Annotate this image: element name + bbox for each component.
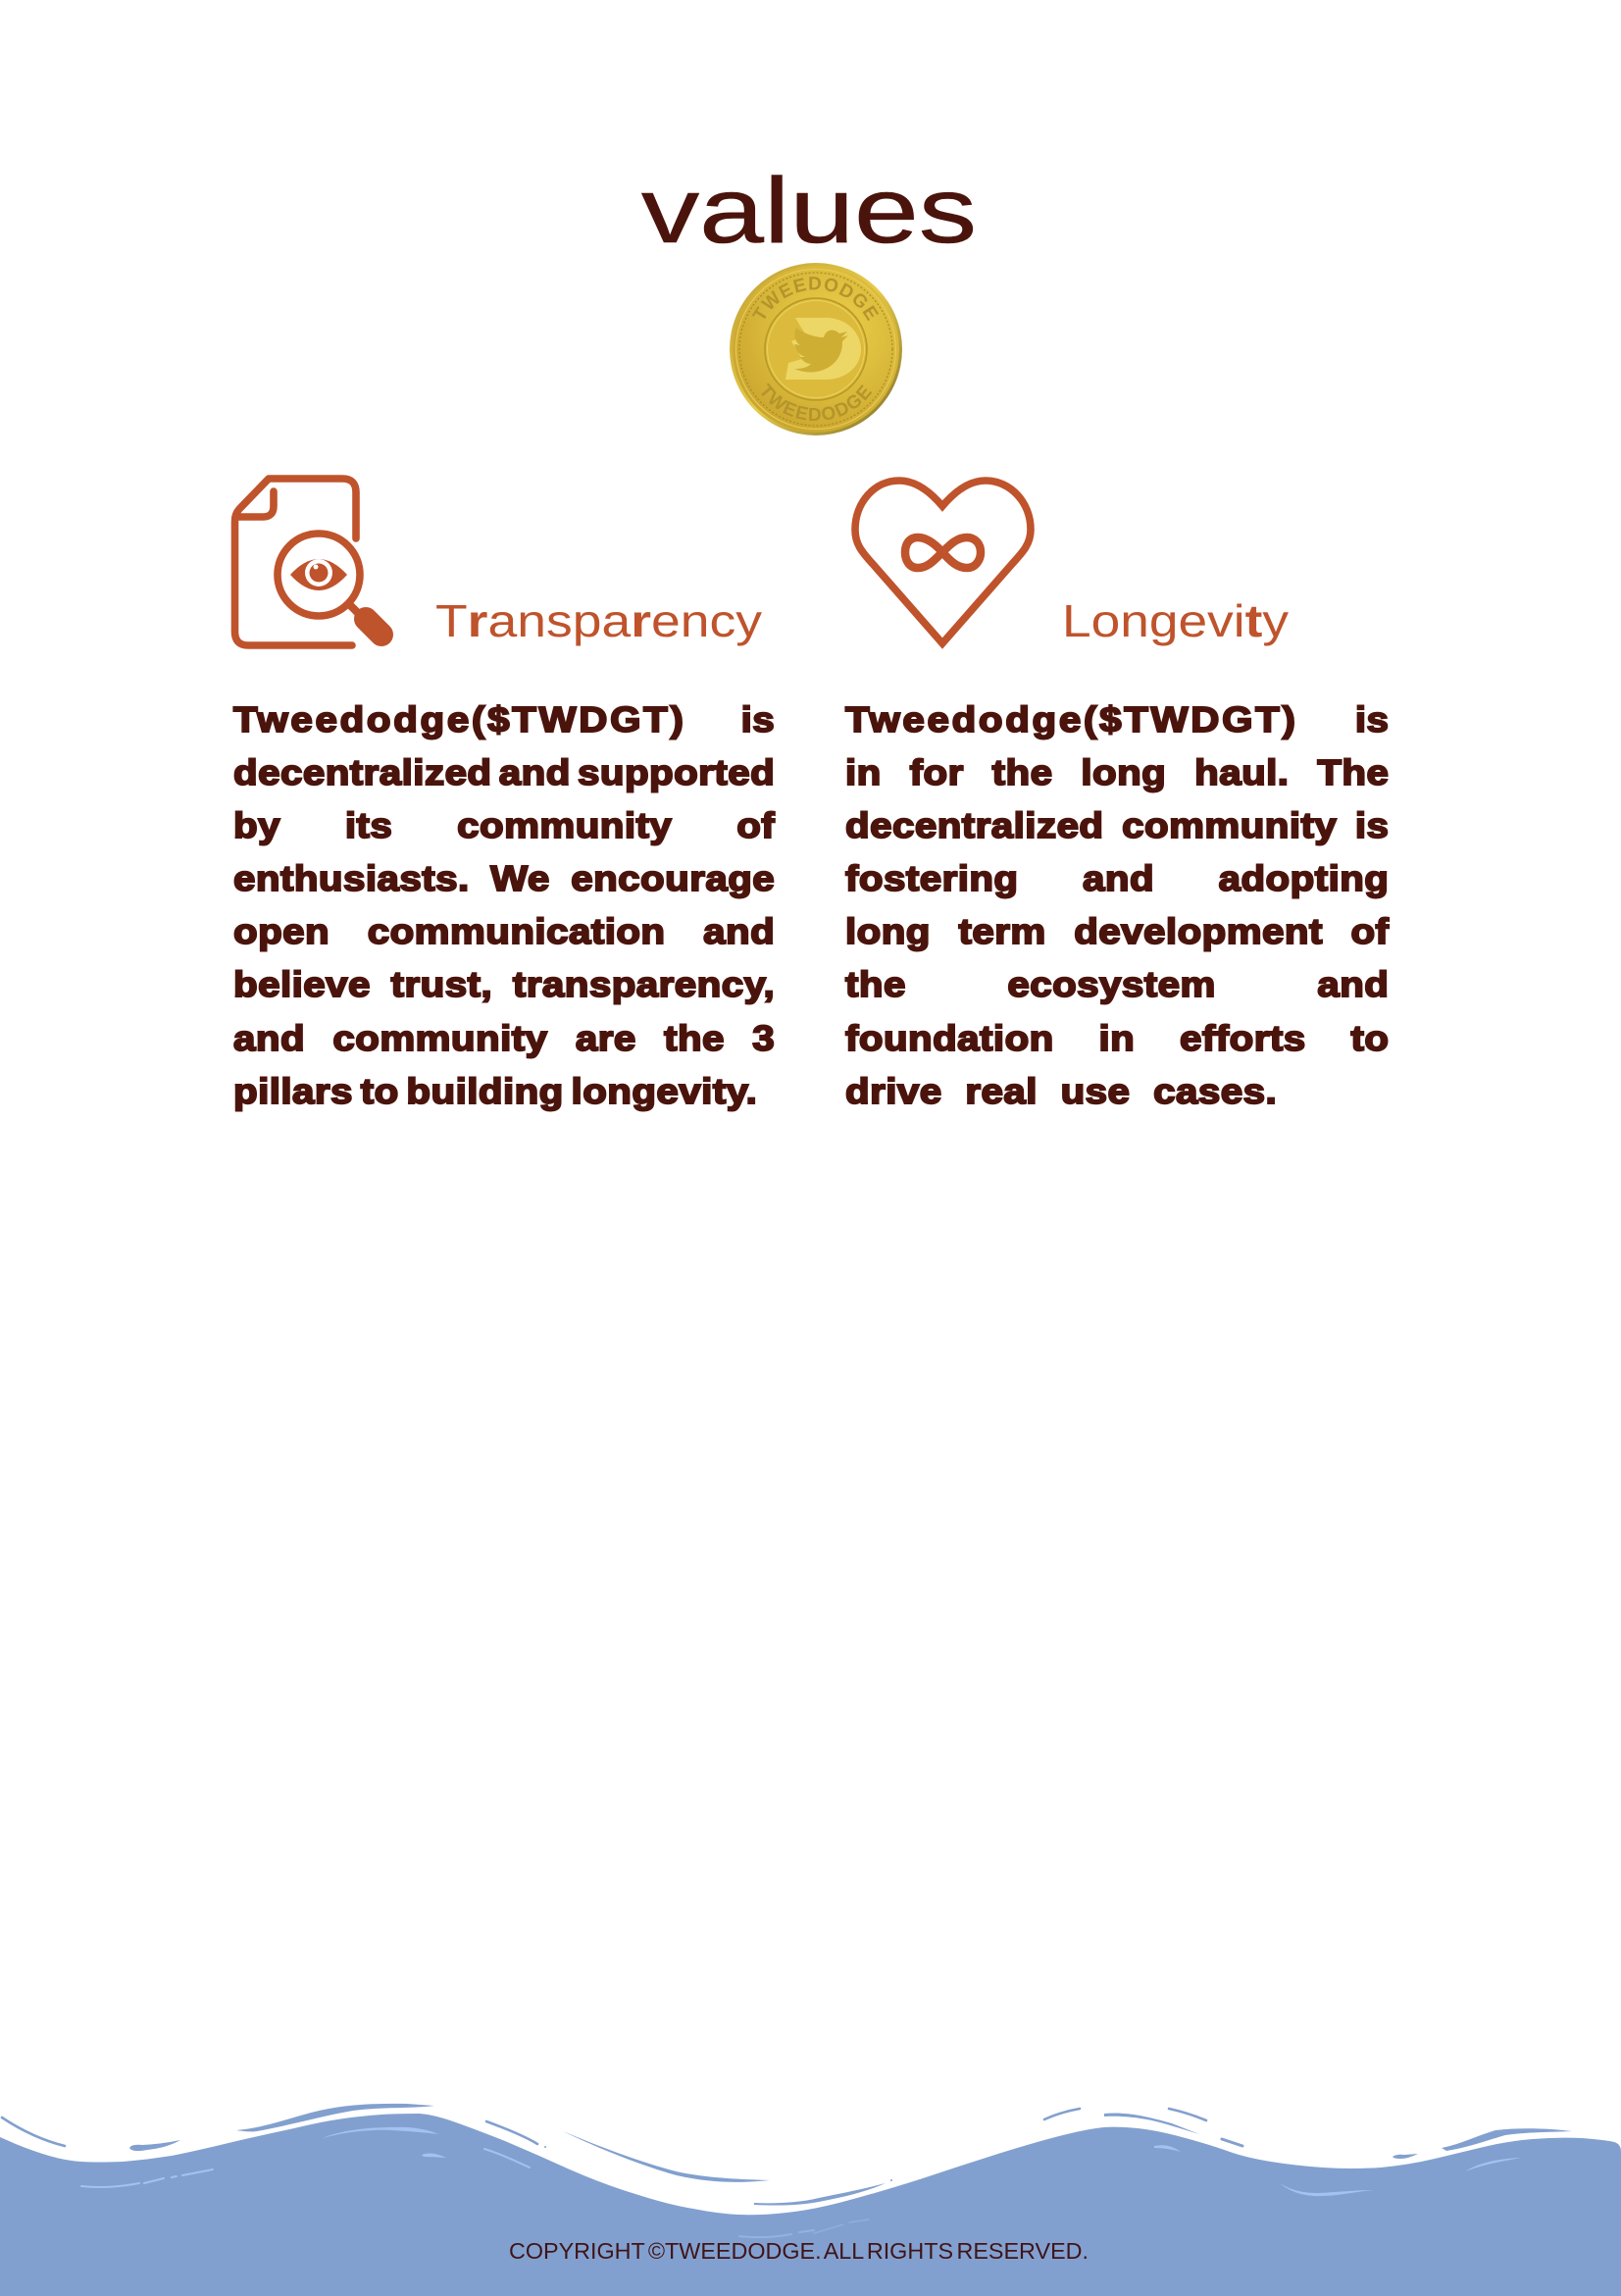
text block: transparency description	[232, 699, 776, 1112]
title: values	[641, 159, 977, 263]
icon: gold Tweedodge coin	[730, 263, 902, 435]
text block: longevity description: decentralized community is	[845, 805, 1389, 845]
text block: transparency description: decentralized and supported	[233, 752, 775, 792]
text block: transparency description: and community are the 3	[233, 1018, 775, 1058]
text block: transparency description: pillars to building longevity.	[233, 1071, 757, 1111]
text block: transparency description: believe trust, transparency,	[233, 964, 775, 1004]
text block: longevity description: in for the long haul. The	[845, 752, 1389, 792]
icon: document with magnifier and eye	[231, 475, 393, 649]
text block: longevity description: foundation in efforts to	[845, 1018, 1389, 1058]
footer copyright text: COPYRIGHT ©TWEEDODGE. ALL RIGHTS RESERVED.	[509, 2238, 1089, 2264]
icon: gold Tweedodge coin: TWEEDODGE	[752, 277, 879, 321]
text block: longevity description: drive real use cases.	[845, 1071, 1277, 1111]
text block: longevity description: long term development of	[845, 911, 1389, 951]
text block: transparency description: by its community of	[233, 805, 775, 845]
text block: transparency description: Tweedodge($TWDGT) is	[233, 699, 775, 740]
heading: Longevity: Longevi ty	[1062, 595, 1289, 646]
text block: longevity description: the ecosystem and	[845, 964, 1389, 1004]
text block: longevity description: fostering and adopting	[845, 858, 1389, 898]
text block: longevity description	[844, 699, 1391, 1111]
heading: Transparency: Transpa rency	[435, 595, 762, 646]
icon: gold Tweedodge coin: TWEEDODGE	[761, 383, 873, 421]
text block: transparency description: open communication and	[233, 911, 775, 951]
text block: longevity description: Tweedodge($TWDGT) is	[845, 699, 1389, 740]
text block: transparency description: enthusiasts. We encourage	[233, 858, 775, 898]
icon: heart with infinity	[851, 477, 1035, 649]
